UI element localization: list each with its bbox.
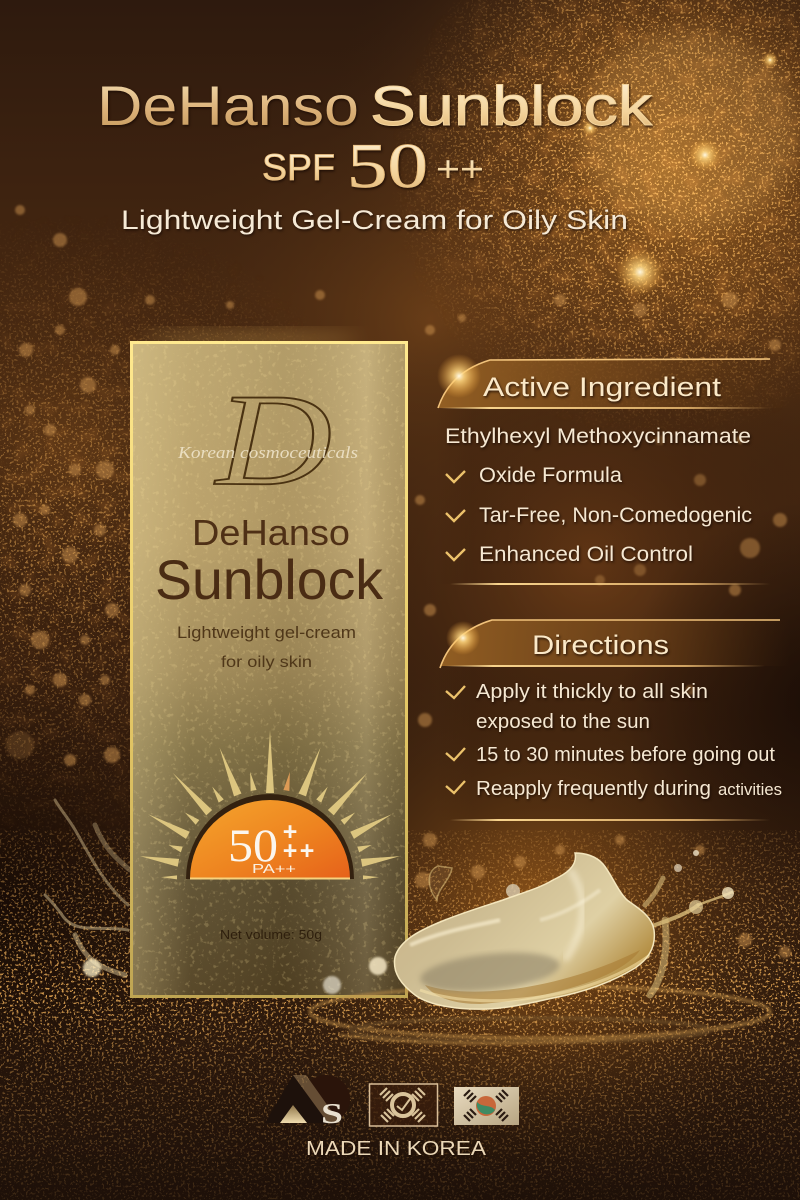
sun emblem: PA++ (252, 861, 296, 876)
footer logo: AS (265, 1075, 350, 1130)
title: DeHanso Sunblock: DeHanso (97, 74, 359, 137)
sun emblem (139, 730, 401, 880)
heading: SPF 50++: SPF (262, 147, 335, 188)
panel: active ingredient (436, 354, 800, 585)
gel swatch (323, 850, 734, 1009)
sun emblem: 50 (228, 820, 278, 872)
floor: liquid ripples (310, 986, 770, 1043)
check item: apply (446, 681, 708, 733)
check item: apply: Apply it thickly to all skin (476, 681, 708, 703)
check item: apply: exposed to the sun (476, 711, 650, 733)
gel splash tendrils (429, 850, 734, 995)
heading: SPF 50++: ++ (436, 148, 484, 189)
made in korea: MADE IN KOREA (306, 1137, 486, 1160)
sun emblem: + (283, 818, 297, 846)
icon: flare (437, 354, 481, 398)
check item: oxide formula: Oxide Formula (479, 464, 622, 487)
footer logo: AS: S (321, 1099, 343, 1130)
title: Sunblock bold: Sunblock (370, 74, 653, 137)
check item: timing: 15 to 30 minutes before going out (476, 744, 775, 766)
header band (438, 360, 790, 408)
box description line 2: for oily skin (221, 654, 312, 671)
heading: directions: Directions (532, 630, 669, 660)
ingredient name: Ethylhexyl Methoxycinnamate (445, 425, 751, 448)
check item: reapply: activities (718, 780, 782, 799)
box product name: Sunblock (155, 548, 384, 611)
box tagline: Korean cosmoceuticals (177, 443, 358, 462)
splash: left water splash (45, 800, 130, 977)
check item: oil control: Enhanced Oil Control (479, 543, 693, 566)
panel: directions (436, 620, 800, 821)
net volume: Net volume: 50g (220, 928, 322, 942)
check item: tar-free: Tar-Free, Non-Comedogenic (479, 504, 752, 527)
heading: SPF 50++ (262, 131, 484, 201)
box logo: script D: D (214, 366, 332, 513)
box description line 1: Lightweight gel-cream (177, 624, 356, 642)
check item: reapply (446, 778, 782, 800)
icon: outlined korean flag (370, 1084, 438, 1126)
sun emblem: + (300, 837, 314, 865)
heading: active ingredient: Active Ingredient (483, 372, 722, 402)
header band (440, 620, 790, 666)
check item: reapply: Reapply frequently during (476, 778, 711, 800)
icon: korean flag (454, 1087, 519, 1125)
sun emblem: + (283, 837, 297, 865)
subtitle: Lightweight Gel-Cream for Oily Skin (121, 205, 628, 235)
box brand name: DeHanso (192, 512, 350, 553)
product box (130, 341, 408, 998)
icon: flare (446, 621, 480, 655)
heading: SPF 50++: 50 (347, 131, 428, 201)
